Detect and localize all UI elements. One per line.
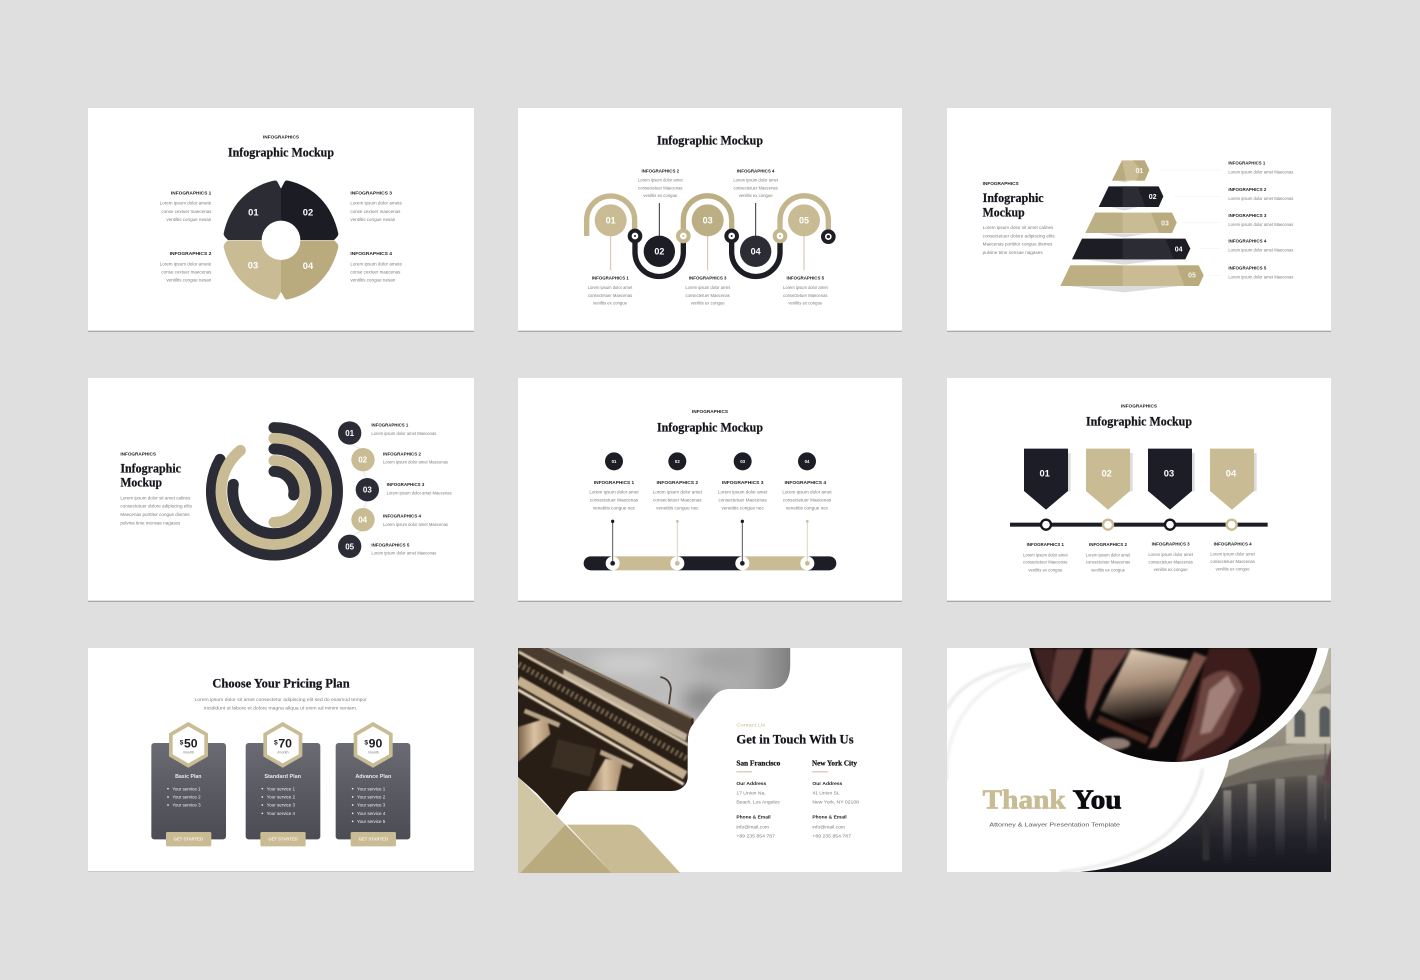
tier 04: 04 <box>1175 246 1183 253</box>
chart: pennants <box>1024 449 1257 510</box>
office: new york city: New York, NY 02108 <box>812 799 860 804</box>
intro text: consectetuer dolore adipiscing elits <box>120 504 193 509</box>
intro text: INFOGRAPHICS <box>983 181 1019 186</box>
number badges: 01 <box>345 429 355 438</box>
label: infographics 3: Lorem ipsum dolor amet <box>685 285 731 290</box>
tier 02 <box>1099 186 1163 207</box>
panel: concentric rings slide <box>88 378 474 602</box>
office: new york city <box>812 760 860 838</box>
intro text: pulvina time mensae nagases <box>120 520 181 525</box>
label: infographics 3: consectetuer Maecenas <box>1148 559 1194 564</box>
label: infographics 2: ventiltis congue nesan <box>166 278 212 283</box>
office: san francisco <box>736 760 781 838</box>
label list: Lorem ipsum dolor amet Maecenas <box>383 460 449 465</box>
chart: concentric arcs <box>211 428 337 555</box>
card: standard plan: /month <box>277 751 289 755</box>
label: infographics 4: INFOGRAPHICS 4 <box>784 480 827 485</box>
label: infographics 2: Lorem ipsum dolor amet <box>638 178 683 183</box>
label: infographics 4: INFOGRAPHICS 4 <box>1214 541 1252 546</box>
card: advance plan: Your service 1 <box>357 786 386 791</box>
label: infographics 1: consectetuer Maecenas <box>590 498 639 503</box>
heading: Infographic Mockup <box>657 133 763 148</box>
thank you heading: You <box>1073 784 1122 814</box>
card: advance plan: Advance Plan <box>355 774 391 780</box>
label: infographics 1: Lorem ipsum dolor amet <box>1023 552 1068 557</box>
label: infographics 4: ventiltis congue nesan <box>350 278 396 283</box>
label: infographics 1: INFOGRAPHICS 1 <box>592 276 629 281</box>
card: basic plan: GET STARTED <box>174 837 203 842</box>
chart: pennants: 02 <box>1101 469 1112 479</box>
label list: Lorem ipsum dolor amet Maecenas <box>371 431 437 436</box>
office: san francisco: San Francisco <box>736 760 781 768</box>
chart: pyramid <box>1060 160 1221 292</box>
panel: thank you slide <box>947 648 1331 872</box>
chart: wave timeline <box>587 196 836 276</box>
label list: Lorem ipsum dolor amet Maecenas <box>1228 169 1294 174</box>
tier 05 <box>1060 265 1204 286</box>
office: new york city: info@mail.com <box>812 824 845 829</box>
tier 02: 02 <box>1149 194 1157 201</box>
card: basic plan: $ <box>180 739 184 746</box>
intro text: Maecenas porttitor congue dismes <box>120 512 190 517</box>
label list: INFOGRAPHICS 4 <box>383 514 421 519</box>
label: infographics 1 <box>588 276 633 306</box>
intro text: Infographic <box>120 460 181 475</box>
office: new york city: 41 Union St, <box>812 790 840 795</box>
card: basic plan: Your service 3 <box>172 803 201 808</box>
label: infographics 1: consectetuer Maecenas <box>1023 560 1068 565</box>
label: infographics 2: conse cextuer maecenas <box>161 269 212 274</box>
thank you heading: Thank <box>983 784 1067 814</box>
label: infographics 1: INFOGRAPHICS 1 <box>1027 542 1064 547</box>
chart: wave timeline: 04 <box>751 247 761 257</box>
label: infographics 3: INFOGRAPHICS 3 <box>1152 542 1190 547</box>
label: infographics 4: Lorem ipsum dolor amet <box>1210 551 1256 556</box>
label list: Lorem ipsum dolor amet Maecenas <box>1228 222 1294 227</box>
number badges <box>338 421 379 558</box>
heading: Choose Your Pricing Plan <box>212 675 350 690</box>
label: infographics 4: Lorem ipsum dolor amet <box>782 490 832 495</box>
label: infographics 4 <box>782 480 832 511</box>
intro text <box>120 452 193 525</box>
panel: pyramid slide <box>947 108 1331 332</box>
label list: INFOGRAPHICS 3 <box>387 482 425 487</box>
label list: Lorem ipsum dolor amet Maecenas <box>1228 248 1294 253</box>
card: standard plan: Standard Plan <box>264 774 301 780</box>
label: infographics 2: INFOGRAPHICS 2 <box>170 251 212 256</box>
number badges <box>605 452 816 470</box>
label: infographics 2: Lorem ipsum dolor amete <box>160 261 212 266</box>
label: infographics 4: consectetuer Maecenas <box>733 185 779 190</box>
number badges: 03 <box>363 486 372 495</box>
label: infographics 4: INFOGRAPHICS 4 <box>737 168 775 173</box>
label: infographics 2: consectetuer Maecenas <box>1086 560 1131 565</box>
tier 01 <box>1112 160 1149 181</box>
chart: pennants: 04 <box>1226 468 1237 478</box>
label: infographics 4: INFOGRAPHICS 4 <box>350 251 393 256</box>
chart: four segment donut: 04 <box>303 261 314 271</box>
office: new york city: Phone & Email <box>812 814 847 819</box>
photo: capitol building <box>1080 648 1331 872</box>
chart: wave timeline: 02 <box>654 247 664 257</box>
label: infographics 4: consectetuer Maecenas <box>783 498 832 503</box>
label: infographics 3 <box>685 276 731 306</box>
card: basic plan: Your service 2 <box>172 795 201 800</box>
chart: timeline line <box>1010 520 1268 530</box>
card: advance plan: /month <box>368 751 379 755</box>
card: standard plan: Your service 2 <box>267 795 295 800</box>
label: infographics 3: ventiltis congue nesan <box>350 217 396 222</box>
panel: donut slide <box>88 108 474 332</box>
label: infographics 3: consectetuer Maecenas <box>718 498 768 503</box>
card: standard plan: 70 <box>278 737 292 751</box>
office: san francisco: info@mail.com <box>736 824 769 829</box>
heading: Infographic Mockup <box>1086 413 1192 428</box>
number badges: 01 <box>612 459 617 464</box>
subtitle: Attorney & Lawyer Presentation Template <box>989 822 1120 828</box>
contact heading <box>736 722 854 747</box>
label: infographics 1: ventiltis congue nesan <box>166 217 212 222</box>
card: advance plan: $ <box>364 739 368 746</box>
intro text <box>983 181 1055 255</box>
office: san francisco: +89 235 854 787 <box>736 833 776 838</box>
label: infographics 2: consectetuer Maecenas <box>653 498 702 503</box>
tier 01: 01 <box>1135 168 1143 175</box>
label: infographics 1: veniltis ex congue <box>593 301 627 306</box>
label: infographics 2: INFOGRAPHICS 2 <box>1089 542 1127 547</box>
subheading <box>194 697 367 711</box>
card: standard plan <box>246 723 320 846</box>
label: infographics 3: venetitis congue nec <box>721 506 765 511</box>
label: infographics 1: Lorem ipsum dolor amet <box>588 285 633 290</box>
label: infographics 1: consectetuer Maecenas <box>588 293 633 298</box>
label: infographics 3: consectetuer Maecenas <box>685 293 731 298</box>
subheading: incididunt ut labore et dolore magna aliqua ut enim ad minim veniam. <box>204 706 357 711</box>
chart: wave timeline: 03 <box>703 216 713 226</box>
subheading: Lorem ipsum dolor sit amet consectetur adipiscing elit sed do eiusmod tempor <box>194 697 367 702</box>
card: standard plan: Your service 3 <box>267 803 295 808</box>
card: advance plan: 90 <box>369 737 383 751</box>
label list: Lorem ipsum dolor amet Maecenas <box>371 551 437 556</box>
tier 03 <box>1085 213 1177 233</box>
label: infographics 2: consectetuer Maecenas <box>638 185 683 190</box>
number badges: 03 <box>740 459 746 464</box>
label: infographics 1: Lorem ipsum dolor amet <box>589 490 639 495</box>
thank you heading <box>982 789 1122 810</box>
label list <box>1228 160 1294 280</box>
label: infographics 3: INFOGRAPHICS 3 <box>350 190 393 195</box>
chart: four segment donut <box>224 180 338 300</box>
chart: segmented bar with stems <box>584 520 836 570</box>
office: san francisco: 17 Union Na, <box>736 790 766 795</box>
label: infographics 1 <box>160 190 212 222</box>
photo: courthouse facade <box>517 647 794 820</box>
intro text: Lorem ipsum dolor sit amet calines <box>983 225 1054 230</box>
label list: Lorem ipsum dolor amet Maecenas <box>387 490 452 495</box>
card: advance plan: Your service 4 <box>357 811 386 816</box>
label: infographics 4: veniltis ex congue <box>739 193 773 198</box>
label list <box>371 423 452 556</box>
label: infographics 2 <box>638 168 683 198</box>
kicker: INFOGRAPHICS <box>1121 403 1157 408</box>
office: new york city: New York City <box>812 760 858 768</box>
label: infographics 5: INFOGRAPHICS 5 <box>786 276 825 281</box>
label: infographics 2 <box>1086 542 1131 572</box>
panel: pricing slide <box>88 648 474 872</box>
card: basic plan: /month <box>183 751 194 755</box>
intro text: Maecenas porttitor congue dismes <box>983 242 1053 247</box>
card: advance plan: Your service 5 <box>357 819 386 824</box>
label: infographics 2: veniltis ex congue <box>643 193 678 198</box>
chart: pennants: 03 <box>1164 468 1174 478</box>
card: advance plan <box>336 723 410 846</box>
intro text: consectetuer dolore adipiscing elits <box>983 233 1055 238</box>
label: infographics 2: veniltis ex congue <box>1091 567 1125 572</box>
panel: horizontal bar timeline slide <box>518 378 902 602</box>
office: san francisco: Phone & Email <box>736 814 771 819</box>
label: infographics 5: Lorem ipsum dolor amet <box>783 285 828 290</box>
tier 03: 03 <box>1161 221 1169 228</box>
label: infographics 4: Lorem ipsum dolor amete <box>350 261 402 266</box>
card: standard plan: Your service 4 <box>267 811 295 816</box>
panel: wave process slide <box>518 108 902 332</box>
label: infographics 3 <box>1148 542 1194 572</box>
label list: Lorem ipsum dolor amet Maecenas <box>1228 196 1294 201</box>
label: infographics 5: consectetuer Maecenas <box>783 293 828 298</box>
label list: INFOGRAPHICS 5 <box>371 543 410 548</box>
label: infographics 2: INFOGRAPHICS 2 <box>656 480 699 485</box>
photo: gavel circle <box>1029 648 1318 762</box>
label: infographics 2: venetitis congue nec <box>656 506 699 511</box>
panel: contact slide <box>517 647 902 873</box>
panel: pennant timeline slide <box>947 378 1331 602</box>
label: infographics 3: INFOGRAPHICS 3 <box>689 276 727 281</box>
chart: wave timeline: 05 <box>799 216 809 226</box>
label: infographics 3: INFOGRAPHICS 3 <box>722 480 764 485</box>
label: infographics 3: conse cextuer maecenas <box>350 209 401 214</box>
number badges: 05 <box>345 542 355 551</box>
label: infographics 2: Lorem ipsum dolor amet <box>1086 552 1131 557</box>
chart: four segment donut: 03 <box>248 260 258 270</box>
label: infographics 1: conse cextuer maecenas <box>161 209 212 214</box>
card: advance plan: Your service 2 <box>357 795 386 800</box>
label: infographics 1: venetitis congue nec <box>593 506 636 511</box>
kicker: INFOGRAPHICS <box>692 409 728 414</box>
label: infographics 1: Lorem ipsum dolor amete <box>160 201 212 206</box>
label: infographics 2 <box>160 251 212 283</box>
label: infographics 4: venetitis congue nec <box>786 506 829 511</box>
tier 05: 05 <box>1188 273 1196 280</box>
label: infographics 2: Lorem ipsum dolor amet <box>653 490 703 495</box>
office: new york city: Our Address <box>812 781 843 786</box>
label: infographics 3 <box>350 190 402 222</box>
card: basic plan <box>151 723 226 846</box>
label: infographics 4: Lorem ipsum dolor amet <box>733 178 779 183</box>
label list: INFOGRAPHICS 2 <box>383 451 421 456</box>
intro text: pulvine time nensae nagases <box>983 250 1043 255</box>
card: basic plan: Basic Plan <box>175 774 201 780</box>
label list: INFOGRAPHICS 3 <box>1228 213 1267 218</box>
office: new york city: +89 235 854 787 <box>812 833 852 838</box>
heading: Infographic Mockup <box>228 145 334 160</box>
label list: Lorem ipsum dolor amet Maecenas <box>383 522 449 527</box>
chart: wave timeline: 01 <box>606 216 616 226</box>
label: infographics 3: veniltis ex congue <box>1154 567 1188 572</box>
card: advance plan: GET STARTED <box>359 837 388 842</box>
label list: INFOGRAPHICS 2 <box>1228 187 1267 192</box>
kicker: INFOGRAPHICS <box>263 135 299 140</box>
number badges: 04 <box>358 516 368 525</box>
contact heading: Contact Us <box>736 722 766 727</box>
label: infographics 3: veniltis ex congue <box>691 301 725 306</box>
label: infographics 4: conse cextuer maecenas <box>350 269 401 274</box>
white ring <box>1030 648 1329 760</box>
intro text: Mockup <box>983 204 1025 219</box>
label list: INFOGRAPHICS 1 <box>371 423 409 428</box>
number badges: 04 <box>805 459 810 464</box>
intro text: Mockup <box>120 475 162 490</box>
card: basic plan: Your service 1 <box>172 786 201 791</box>
intro text: Infographic <box>983 190 1044 205</box>
label: infographics 2: INFOGRAPHICS 2 <box>641 168 680 173</box>
card: advance plan: Your service 3 <box>357 803 386 808</box>
office: san francisco: Beach, Los Angeles <box>736 799 780 804</box>
tier 04 <box>1072 239 1190 259</box>
label: infographics 4: consectetuer Maecenas <box>1210 559 1256 564</box>
label: infographics 3: Lorem ipsum dolor amet <box>718 490 768 495</box>
label: infographics 4: veniltis ex congue <box>1216 567 1250 572</box>
label: infographics 1: INFOGRAPHICS 1 <box>171 190 212 195</box>
intro text: Lorem ipsum dolor sit amet calines <box>120 496 191 501</box>
heading: Infographic Mockup <box>657 419 763 434</box>
label: infographics 3: Lorem ipsum dolor amet <box>1148 552 1194 557</box>
label: infographics 4 <box>350 251 402 283</box>
card: standard plan: Your service 1 <box>267 786 295 791</box>
card: standard plan: $ <box>274 739 278 746</box>
label list: INFOGRAPHICS 5 <box>1228 265 1267 270</box>
intro text: INFOGRAPHICS <box>120 452 156 457</box>
chart: pennants: 01 <box>1039 469 1050 479</box>
label: infographics 4 <box>1210 541 1256 572</box>
label list: INFOGRAPHICS 1 <box>1228 160 1266 165</box>
chart: four segment donut: 01 <box>248 208 259 218</box>
number badges: 02 <box>358 456 368 465</box>
label: infographics 5: veniltis ex congue <box>788 301 823 306</box>
white swoosh shape <box>946 647 1246 873</box>
card: standard plan: GET STARTED <box>268 837 298 842</box>
label: infographics 5 <box>783 276 828 306</box>
label list: INFOGRAPHICS 4 <box>1228 239 1267 244</box>
label list: Lorem ipsum dolor amet Maecenas <box>1228 275 1294 280</box>
label: infographics 2 <box>653 480 703 511</box>
chart: four segment donut: 02 <box>303 208 313 218</box>
label: infographics 1: INFOGRAPHICS 1 <box>594 480 635 485</box>
label: infographics 3: Lorem ipsum dolor amete <box>350 201 402 206</box>
label: infographics 4 <box>733 168 779 198</box>
contact heading: Get in Touch With Us <box>736 732 854 747</box>
decorative gold shapes <box>518 777 680 873</box>
card: basic plan: 50 <box>184 737 198 751</box>
number badges: 02 <box>675 459 680 464</box>
label: infographics 1 <box>589 480 639 511</box>
label: infographics 3 <box>718 480 768 511</box>
label: infographics 1 <box>1023 542 1068 572</box>
office: san francisco: Our Address <box>736 781 767 786</box>
label: infographics 1: veniltis ex congue <box>1028 567 1063 572</box>
